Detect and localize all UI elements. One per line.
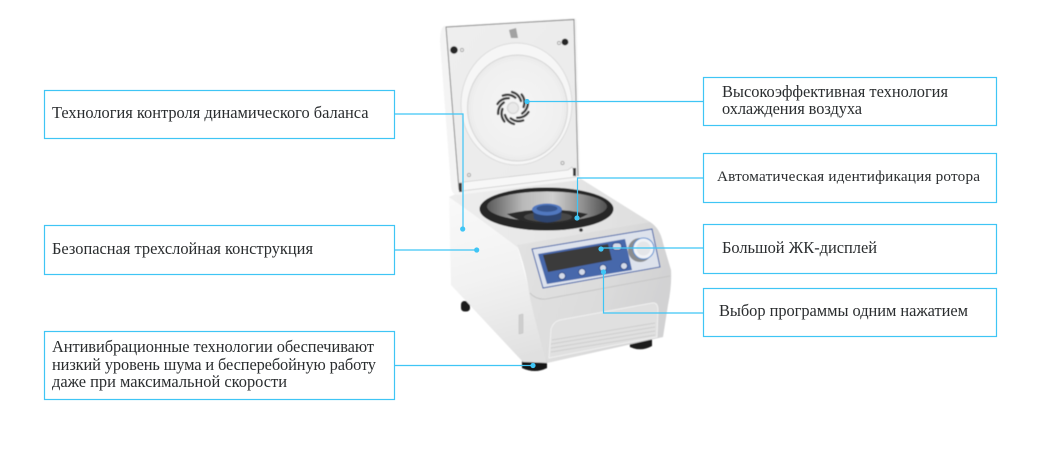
callout: safe construction (44, 226, 394, 274)
leader lines (394, 99, 703, 368)
lid bottom hinge strip (459, 167, 576, 191)
control panel (532, 229, 660, 288)
LCD display (543, 244, 612, 272)
centrifuge device (440, 18, 671, 371)
rotor chamber (480, 188, 614, 232)
callout: anti-vibration (44, 332, 394, 400)
leader: dynamic balance (394, 114, 465, 232)
callout: safe construction: Безопасная трехслойная конструкция (52, 239, 313, 258)
leader: safe construction (394, 247, 479, 253)
front panel contour (530, 276, 670, 299)
callout: rotor identification (704, 154, 996, 202)
device body side (449, 177, 650, 363)
side vent label (519, 314, 523, 334)
leader: air cooling (524, 99, 703, 104)
callout: LCD display (704, 224, 996, 274)
device top surface (449, 177, 654, 247)
lid latch (509, 28, 518, 38)
callout: dynamic balance (44, 90, 394, 138)
callout: air cooling (704, 78, 996, 126)
leader: program selection (601, 269, 703, 313)
cooling fan (495, 90, 531, 126)
device front face (517, 222, 671, 363)
panel buttons (559, 243, 627, 279)
callout: air cooling: охлаждения воздуха (722, 99, 863, 118)
lid disc (461, 43, 572, 165)
lid screws (450, 39, 568, 54)
open lid (440, 18, 580, 195)
callout: air cooling: Высокоэффективная технология (722, 82, 948, 101)
callout: dynamic balance: Технология контроля динамического баланса (52, 103, 369, 122)
lid small screws (460, 41, 564, 177)
callout: anti-vibration: Антивибрационные технологии обеспечивают (52, 337, 374, 356)
lower vent cover (549, 303, 658, 358)
callout: rotor identification: Автоматическая идентификация ротора (717, 168, 980, 185)
device feet (461, 301, 652, 371)
callout: anti-vibration: даже при максимальной скорости (52, 372, 287, 391)
callout: anti-vibration: низкий уровень шума и бесперебойную работу (52, 355, 377, 374)
hinge slots (459, 168, 576, 192)
control knob (628, 238, 654, 262)
leader: anti-vibration (394, 363, 536, 368)
leader: rotor identification (574, 178, 703, 221)
callout: program selection (704, 288, 996, 336)
callout: program selection: Выбор программы одним нажатием (719, 301, 968, 320)
leader: LCD display (598, 246, 703, 252)
callout: LCD display: Большой ЖК-дисплей (722, 238, 877, 257)
